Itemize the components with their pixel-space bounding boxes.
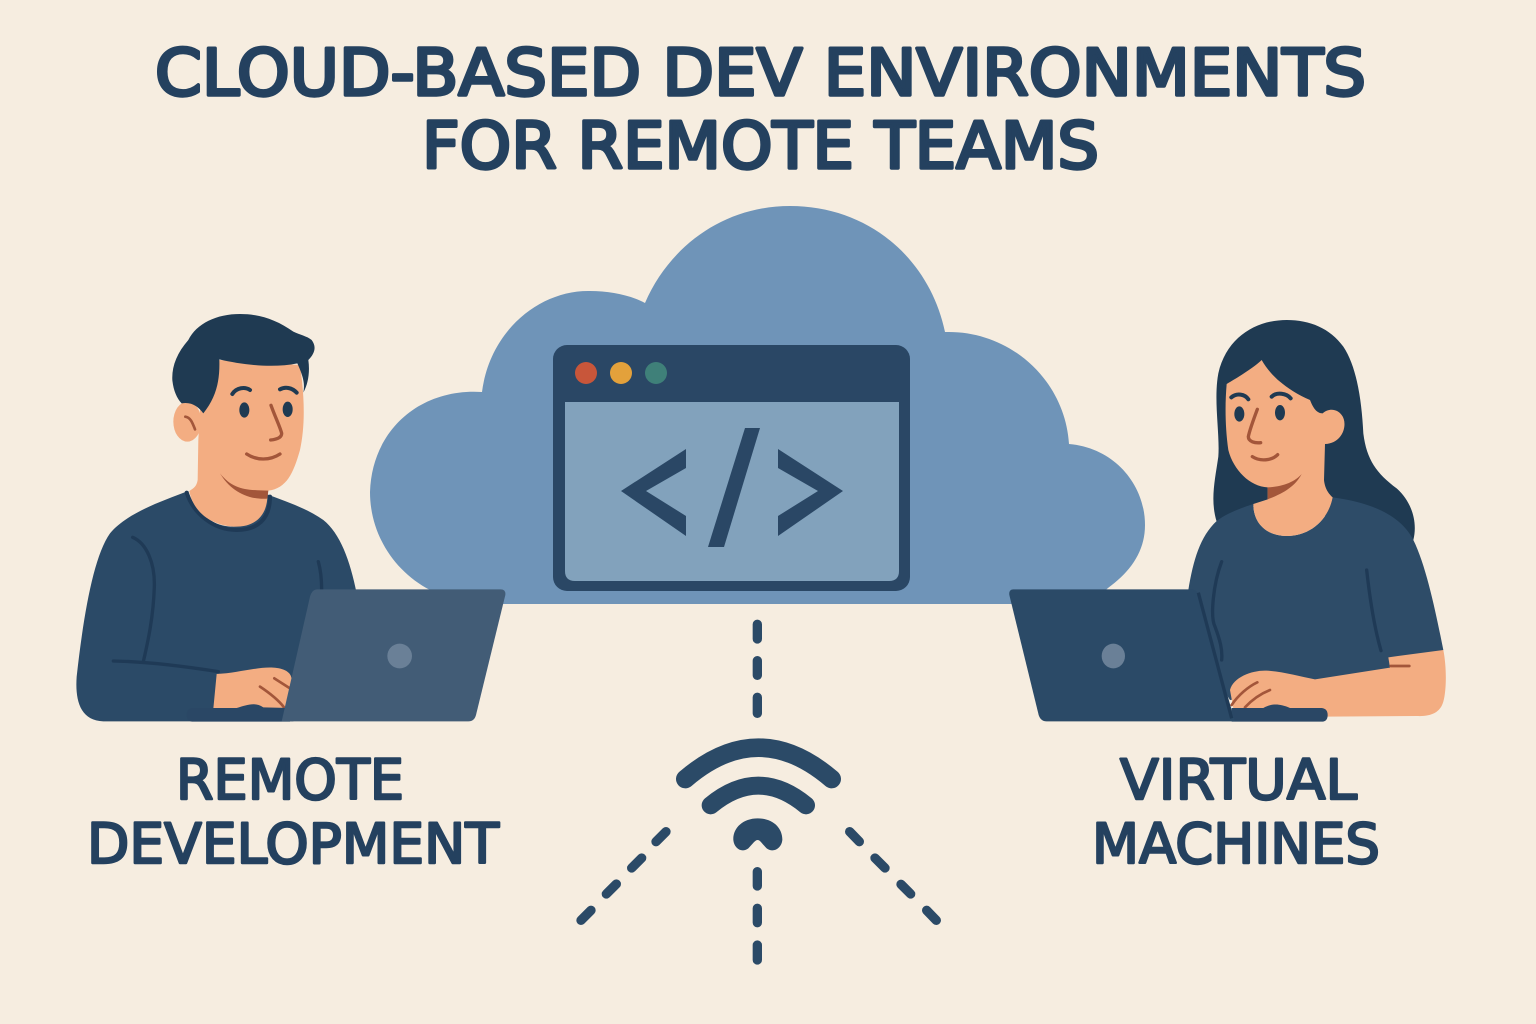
t-shirt [1187, 497, 1443, 700]
sweater [76, 491, 357, 721]
label: remote development [87, 748, 499, 876]
person: virtual machines user [1009, 320, 1446, 722]
t-shirt lines [1213, 562, 1381, 660]
title: FOR REMOTE TEAMS [422, 110, 1099, 184]
long hair [1213, 320, 1415, 540]
window control dots [575, 362, 667, 384]
laptop [282, 589, 505, 721]
arm and hand [1230, 650, 1446, 717]
sweater lines [113, 493, 322, 672]
keyboard base [1232, 704, 1328, 722]
dashed connection lines [581, 624, 936, 960]
person: remote developer [76, 314, 505, 722]
face details [1231, 394, 1302, 499]
laptop [1009, 589, 1235, 721]
icon: code brackets [621, 428, 843, 547]
hand [213, 668, 292, 709]
cloud [370, 206, 1145, 604]
label: remote development: DEVELOPMENT [87, 812, 499, 876]
face details [185, 388, 297, 499]
icon: wifi [685, 748, 832, 850]
label: virtual machines: MACHINES [1092, 812, 1380, 876]
hair [172, 314, 315, 413]
label: virtual machines: VIRTUAL [1120, 748, 1357, 812]
label: remote development: REMOTE [176, 748, 404, 812]
ear [173, 402, 201, 442]
window frame [553, 345, 910, 591]
head, neck and ear [1226, 360, 1344, 536]
code window [553, 345, 910, 591]
keyboard base [187, 704, 290, 722]
title: CLOUD-BASED DEV ENVIRONMENTS [155, 37, 1366, 111]
head and neck [189, 360, 304, 527]
title [155, 37, 1366, 184]
window content area [565, 402, 899, 581]
label: virtual machines [1092, 748, 1380, 876]
wifi and connections [581, 624, 936, 960]
